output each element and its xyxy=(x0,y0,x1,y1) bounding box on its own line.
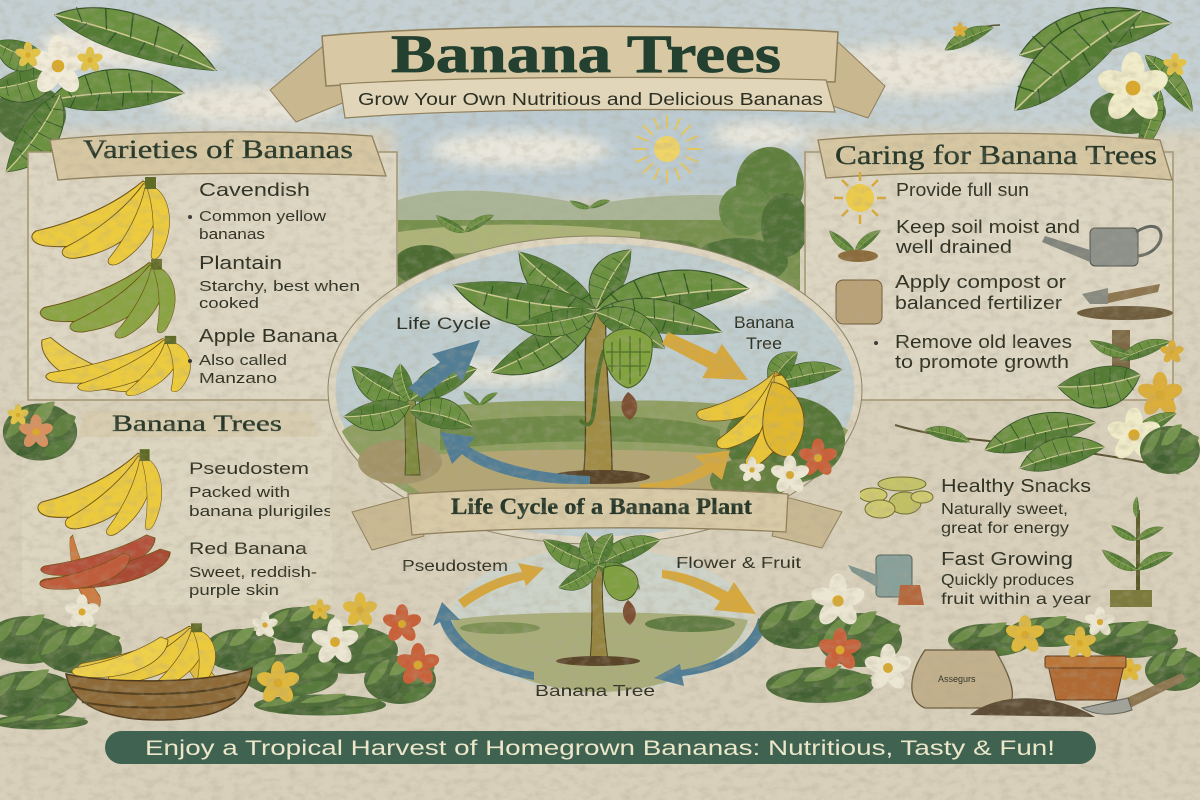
icon: trowel and soil xyxy=(1077,284,1173,320)
footer banner: Enjoy a Tropical Harvest of Homegrown Bananas: Nutritious, Tasty & Fun! xyxy=(145,737,1055,760)
item: pseudostem: Pseudostem xyxy=(189,459,309,478)
heading banner: banana trees: Banana Trees xyxy=(112,411,282,436)
label: banana tree: Banana Tree xyxy=(535,683,655,700)
decoration: right branch with leaves and flower xyxy=(895,401,1200,479)
young banana plant xyxy=(342,351,499,475)
decoration: top-left palm leaves and flowers xyxy=(0,0,225,186)
foliage: bottom left garden xyxy=(0,592,441,730)
item: plantain xyxy=(40,253,360,341)
item: remove old leaves xyxy=(874,332,1072,372)
item: red banana: Sweet, reddish- xyxy=(189,564,317,581)
item: keep soil moist: well drained xyxy=(895,237,1012,257)
foliage: bottom right garden xyxy=(758,574,1200,717)
sack: Assegurs xyxy=(938,674,976,684)
block: fast growing: fruit within a year xyxy=(941,591,1092,608)
heading banner: caring xyxy=(818,133,1172,180)
item: remove old leaves: Remove old leaves xyxy=(895,332,1072,352)
landscape behind oval xyxy=(393,147,809,300)
item: keep soil moist xyxy=(825,217,1161,266)
panel: caring for banana trees xyxy=(805,133,1173,400)
item: apple banana: Manzano xyxy=(199,370,277,387)
heading banner: banana trees xyxy=(78,411,318,437)
item: provide full sun: Provide full sun xyxy=(896,180,1029,200)
subtitle: Grow Your Own Nutritious and Delicious Bananas xyxy=(358,89,823,109)
title: Banana Trees xyxy=(391,24,781,84)
item: red banana: Red Banana xyxy=(189,539,308,558)
icon: sun xyxy=(633,115,701,183)
item: plantain: Starchy, best when xyxy=(199,278,360,295)
item: apple banana: Apple Banana xyxy=(199,326,339,346)
heading banner: caring: Caring for Banana Trees xyxy=(835,140,1157,170)
item: pseudostem: banana plurigiles xyxy=(189,503,333,520)
right banana bunch xyxy=(695,343,844,495)
main banana tree xyxy=(449,238,751,484)
label: life cycle: Life Cycle xyxy=(396,315,491,333)
sack xyxy=(912,650,1012,708)
item: cavendish xyxy=(32,177,326,269)
label: banana tree: Tree xyxy=(746,335,782,353)
item: keep soil moist: Keep soil moist and xyxy=(896,217,1080,237)
item: provide full sun xyxy=(834,172,1029,224)
block: fast growing xyxy=(848,497,1175,608)
panel: banana trees xyxy=(3,402,333,611)
block: healthy snacks: great for energy xyxy=(941,520,1069,537)
item: apply compost xyxy=(836,272,1173,324)
footer banner xyxy=(105,731,1096,764)
decoration: right leaf and yellow flowers xyxy=(1056,330,1185,418)
arrow: orange right xyxy=(662,570,756,614)
item: cavendish: Common yellow xyxy=(199,208,326,225)
item: apple banana: Also called xyxy=(199,352,287,369)
arrow: blue up xyxy=(408,340,480,398)
item: plantain: cooked xyxy=(199,295,259,312)
soil pile xyxy=(970,698,1095,717)
heading banner: varieties: Varieties of Bananas xyxy=(83,135,353,164)
arrow: orange left xyxy=(458,563,544,608)
heading banner: varieties xyxy=(50,132,386,180)
arrow: blue left curve xyxy=(433,602,534,680)
label: banana tree xyxy=(734,314,795,353)
lower life cycle diagram xyxy=(402,526,802,700)
block: fast growing: Quickly produces xyxy=(941,572,1074,589)
item: apply compost: balanced fertilizer xyxy=(895,293,1062,313)
icon: watering can xyxy=(1042,226,1161,266)
banner: life cycle of a banana plant xyxy=(352,488,842,550)
item: pseudostem xyxy=(38,449,333,539)
block: healthy snacks: Healthy Snacks xyxy=(941,476,1091,496)
arrow: blue right curve xyxy=(654,618,768,686)
small banana tree xyxy=(537,526,663,666)
icon: seedling xyxy=(1098,497,1175,607)
basket of bananas xyxy=(66,623,252,720)
item: plantain: Plantain xyxy=(199,253,282,273)
item: cavendish: bananas xyxy=(199,226,265,243)
item: apple banana xyxy=(34,326,339,398)
oval life cycle scene xyxy=(328,236,862,544)
block: healthy snacks: Naturally sweet, xyxy=(941,501,1068,518)
item: red banana xyxy=(40,534,317,611)
item: apply compost: Apply compost or xyxy=(895,272,1066,292)
block: fast growing: Fast Growing xyxy=(941,549,1073,569)
panel: varieties of bananas xyxy=(28,132,397,400)
flower pot xyxy=(1045,626,1126,700)
label: flower and fruit: Flower & Fruit xyxy=(676,555,802,572)
item: remove old leaves: to promote growth xyxy=(895,352,1069,372)
trowel xyxy=(1082,673,1186,714)
decoration: flower sprig xyxy=(3,402,77,460)
label: pseudostem: Pseudostem xyxy=(402,558,508,575)
item: red banana: purple skin xyxy=(189,582,279,599)
item: pseudostem: Packed with xyxy=(189,484,290,501)
title banner xyxy=(270,24,885,122)
label: banana tree: Banana xyxy=(734,314,795,332)
arrow: blue curved xyxy=(440,432,590,484)
banner: life cycle of a banana plant: Life Cycle of a Banana Plant xyxy=(451,494,752,519)
item: cavendish: Cavendish xyxy=(199,180,310,200)
block: healthy snacks xyxy=(859,476,1091,537)
decoration: top-right palm leaves and flowers xyxy=(941,0,1200,157)
arrow: orange curved xyxy=(640,450,730,492)
arrow: orange down xyxy=(662,332,748,380)
